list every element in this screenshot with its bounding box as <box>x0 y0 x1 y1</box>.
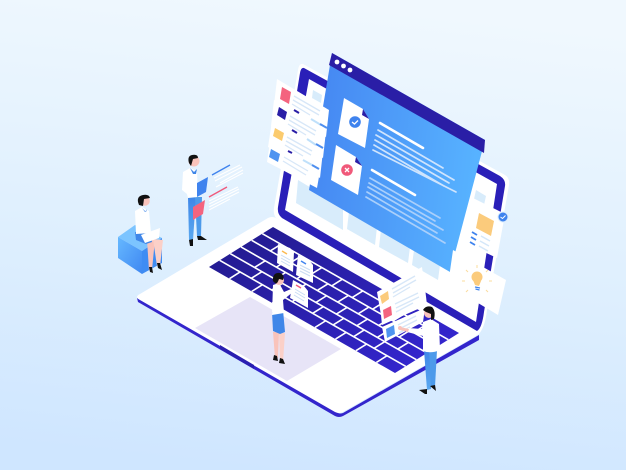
document with cross mark <box>331 145 362 195</box>
document c <box>290 280 308 308</box>
screen tiles <box>296 90 486 280</box>
pink folder <box>193 200 205 220</box>
card 1 <box>377 267 425 315</box>
documents held by standing woman <box>277 244 313 308</box>
person: seated woman on cube <box>118 195 163 274</box>
card 3 <box>382 308 425 342</box>
person: standing man right <box>398 306 440 394</box>
card 2 <box>271 100 327 158</box>
icon: lightbulb <box>462 265 492 292</box>
laptop base <box>137 217 479 417</box>
blue folder <box>197 177 208 197</box>
card 2 <box>380 288 427 325</box>
person: standing man left <box>182 155 243 246</box>
document with check mark <box>338 98 369 148</box>
laptop lid <box>274 64 509 335</box>
text lines, upper block <box>373 123 456 192</box>
check badge <box>498 212 508 222</box>
application window <box>309 53 485 272</box>
floating blue text lines <box>212 165 243 187</box>
card 3 <box>268 121 323 178</box>
floating pink text lines <box>209 187 239 210</box>
text lines, lower block <box>366 170 445 243</box>
keyboard <box>209 227 459 373</box>
floating cards near right person <box>377 267 427 342</box>
lightbulb card <box>448 250 506 315</box>
trackpad <box>195 297 341 381</box>
card 1 <box>274 79 329 137</box>
card 4 <box>267 142 320 188</box>
document b <box>296 255 313 283</box>
window control dots <box>335 60 352 72</box>
person: standing woman <box>272 273 293 364</box>
blue cube seat <box>118 225 162 274</box>
right card with yellow image <box>465 198 508 258</box>
document a <box>277 244 294 272</box>
left stacked cards <box>267 79 329 188</box>
laptop on lap <box>141 228 160 243</box>
